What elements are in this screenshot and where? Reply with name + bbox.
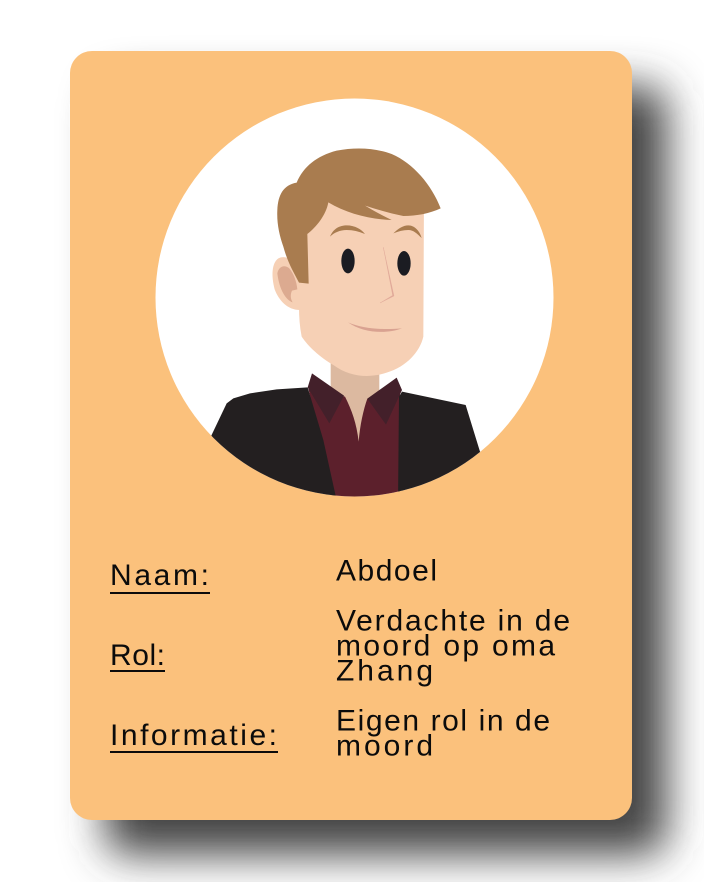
nose [380,247,394,303]
value: Abdoel: Abdoel [336,554,437,588]
collar [308,373,402,425]
value: role description [336,604,570,688]
value: information description: moord [336,730,433,762]
hair [277,148,441,284]
jacket right [398,392,480,492]
ear [272,257,300,310]
shirt [308,388,400,503]
card drop shadow [105,86,667,855]
mouth [348,322,402,332]
label: Naam: Naam: [110,559,209,592]
label: Informatie: Informatie: [110,719,277,752]
inner ear [277,266,297,302]
value: role description: Verdachte in de [336,604,570,638]
value: information description [336,704,550,762]
portrait circle [156,98,554,496]
value: role description: moord op oma [336,630,555,662]
value: role description: Zhang [336,654,433,688]
portrait illustration: man in dark jacket [211,148,480,496]
label: Rol: Rol: [110,639,165,672]
face [297,193,424,376]
eyebrows [330,225,422,238]
value: information description: Eigen rol in de [336,704,550,738]
jacket left [211,387,336,496]
neck [331,360,379,442]
card panel [70,51,632,820]
eyes [341,249,411,276]
